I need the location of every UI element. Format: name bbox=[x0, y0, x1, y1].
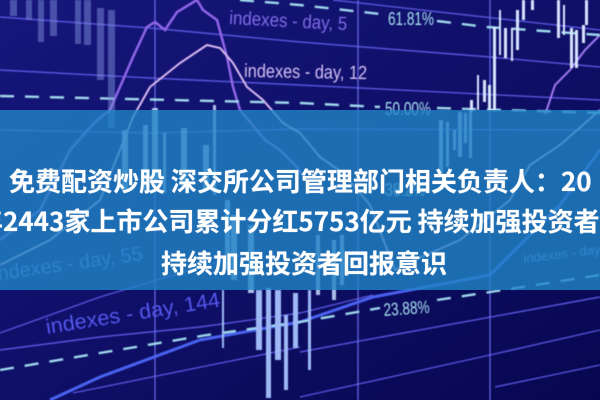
label: 50.00%: 50.00% bbox=[385, 99, 431, 119]
label: 61.81%: 61.81% bbox=[388, 9, 434, 29]
candlesticks: upper left bbox=[10, 0, 115, 128]
label: indexes day 5: indexes - day, 5 bbox=[229, 8, 348, 35]
label: indexes day 12: indexes - day, 12 bbox=[244, 61, 367, 84]
title line 1: 免费配资炒股 深交所公司管理部门相关负责人：20 bbox=[9, 162, 592, 199]
title line 3: 持续加强投资者回报意识 bbox=[161, 244, 447, 281]
label: 38.2%: 38.2% bbox=[385, 180, 425, 200]
candlesticks: upper right bbox=[470, 0, 588, 112]
moving average line: thick blue bbox=[50, 150, 600, 400]
right rising purple line bbox=[545, 35, 600, 115]
pale moving average: day 12 bbox=[0, 45, 600, 270]
translucent title band bbox=[0, 110, 600, 290]
label: 23.88%: 23.88% bbox=[383, 297, 430, 320]
purple moving average: day 5 bbox=[0, 0, 310, 240]
candlesticks: middle band bbox=[122, 105, 472, 300]
candlesticks: lower bbox=[222, 288, 311, 398]
label: indexes day 144: indexes - day, 144 bbox=[44, 289, 222, 339]
